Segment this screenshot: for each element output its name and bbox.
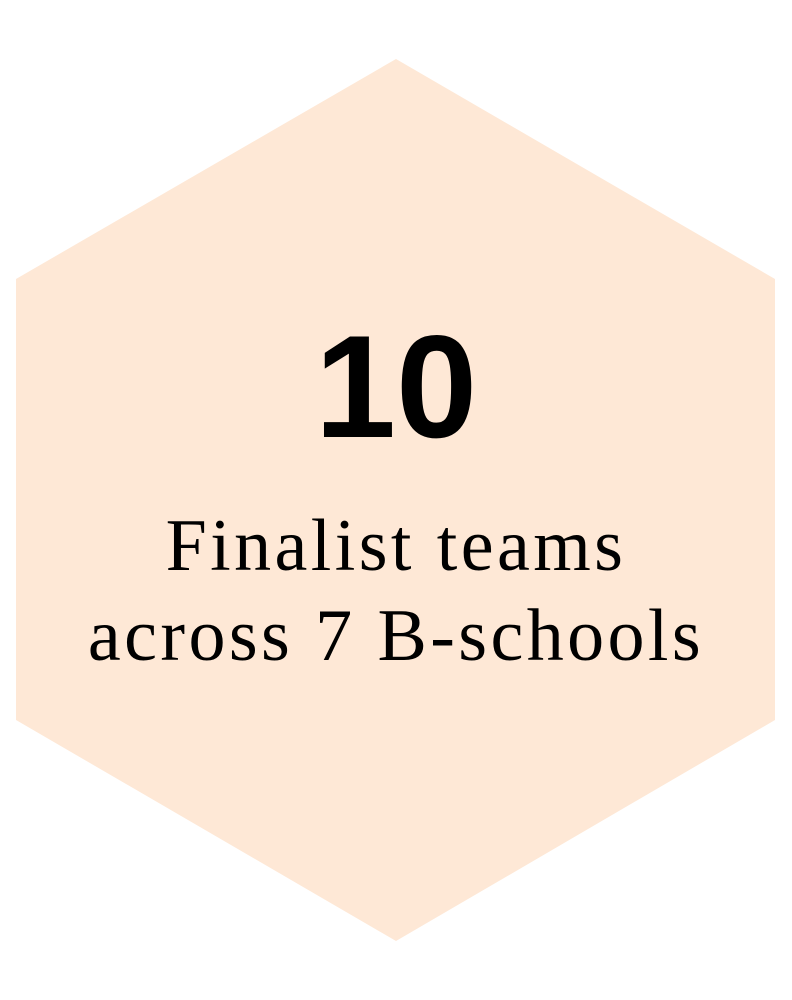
caption text: across 7 B-schools (88, 595, 704, 677)
big number: 10 (315, 305, 477, 468)
caption text (88, 505, 704, 677)
caption text: Finalist teams (166, 505, 626, 587)
